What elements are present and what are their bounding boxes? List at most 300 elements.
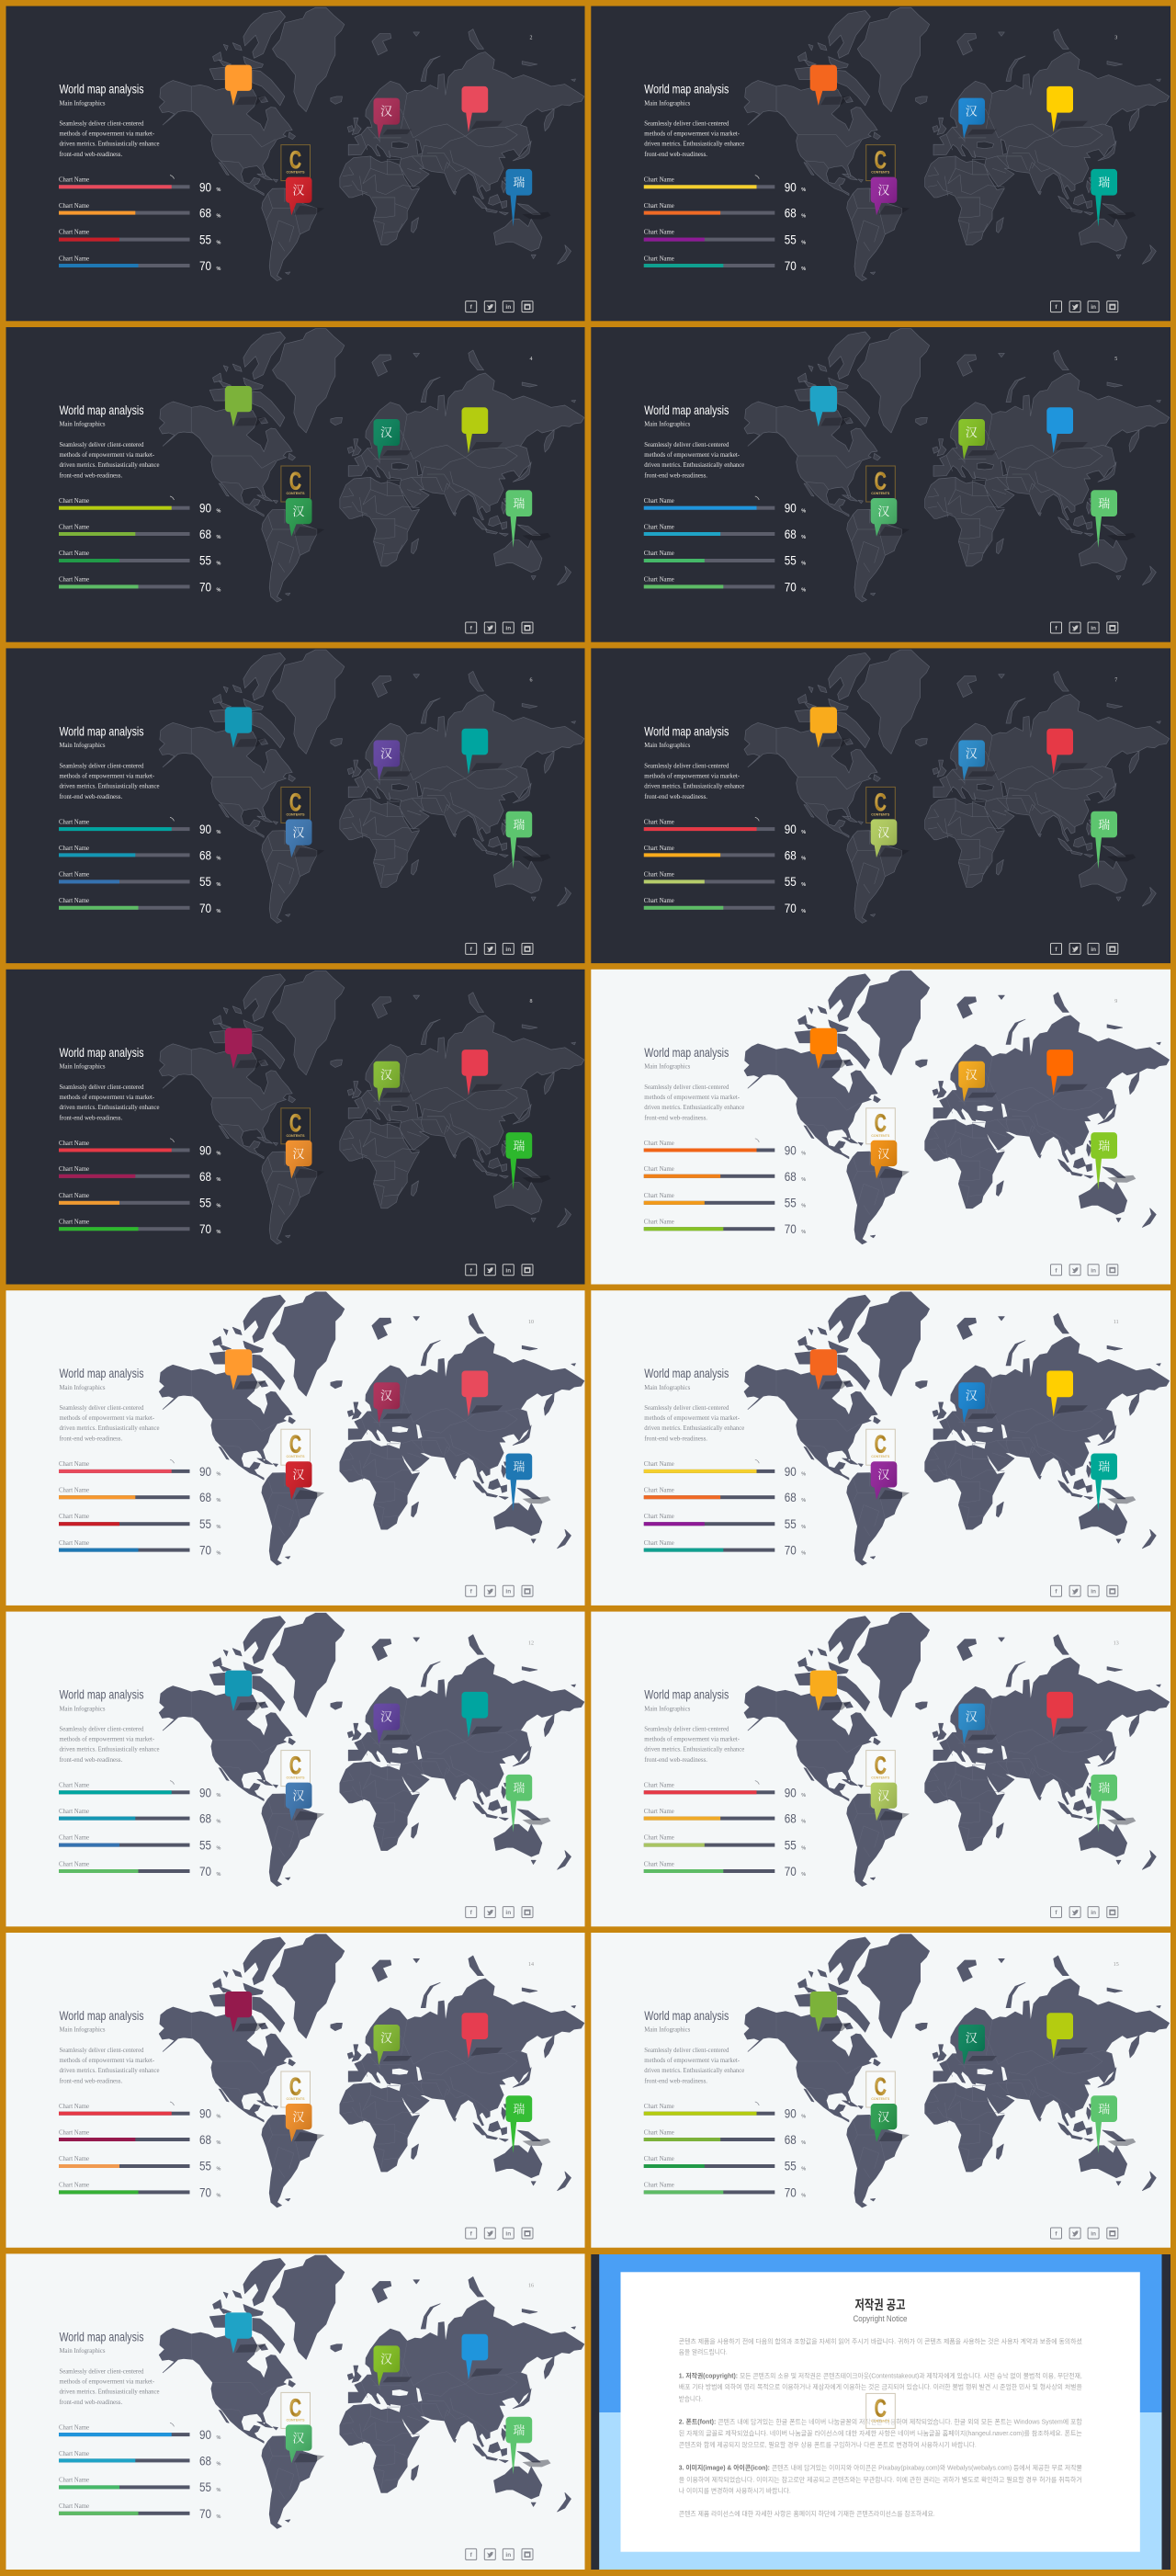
- panel: dark slide 4: [6, 327, 584, 642]
- bar row 70: [59, 255, 220, 273]
- description: driven metrics. Enthusiastically enhance: [59, 1424, 160, 1432]
- pin: South America: 汉: [877, 502, 889, 519]
- bar row 68: [644, 1808, 806, 1826]
- pin: North America: [225, 1028, 266, 1069]
- watermark badge: [281, 145, 311, 181]
- bar row 90: 90: [785, 501, 797, 516]
- bar row 70: Chart Name: [59, 1219, 89, 1226]
- description: front-end web-readiness.: [644, 2077, 707, 2084]
- bar row 68: 68: [199, 527, 211, 541]
- watermark badge: C: [875, 1109, 887, 1137]
- social icons: [1051, 1907, 1118, 1918]
- bar row 70: %: [217, 1230, 220, 1235]
- watermark badge: C: [289, 467, 301, 494]
- pin: South America: [286, 1140, 324, 1178]
- bar row 90: %: [217, 2114, 220, 2119]
- bar row 68: Chart Name: [59, 1487, 89, 1494]
- bar row 90: %: [801, 2114, 806, 2119]
- bar row 68: Chart Name: [59, 523, 89, 530]
- pin: Europe: [373, 1704, 412, 1744]
- bar row 68: 68: [199, 1811, 211, 1826]
- watermark badge: [281, 1429, 311, 1465]
- heading: World map analysis: [59, 2329, 143, 2343]
- watermark badge: CONTENTS: [871, 2418, 890, 2423]
- watermark badge: C: [875, 1431, 887, 1458]
- bar row 90: [59, 1140, 220, 1158]
- pin: South America: 汉: [292, 1787, 304, 1804]
- world map: [159, 2255, 584, 2528]
- pin: Europe: 汉: [380, 102, 392, 119]
- bar row 70: Chart Name: [644, 897, 674, 904]
- pin: South America: [871, 177, 910, 215]
- bar row 70: [59, 2502, 220, 2521]
- watermark badge: CONTENTS: [871, 491, 890, 495]
- heading: World map analysis: [644, 1687, 729, 1702]
- bar row 90: %: [217, 1793, 220, 1799]
- panel: light slide 11: [591, 1290, 1170, 1606]
- bar row 70: [59, 576, 220, 594]
- pin: Australasia: [505, 1132, 551, 1190]
- heading: World map analysis: [59, 1045, 143, 1060]
- description: front-end web-readiness.: [59, 2398, 122, 2406]
- bar row 68: %: [217, 2140, 220, 2146]
- watermark badge: CONTENTS: [871, 2096, 890, 2101]
- watermark badge: CONTENTS: [287, 491, 305, 495]
- pin: Australasia: 瑞: [1098, 2099, 1110, 2117]
- subheading: Main Infographics: [644, 2026, 690, 2034]
- description: Seamlessly deliver client-centered: [644, 1725, 729, 1733]
- bar row 90: 90: [785, 2106, 797, 2121]
- bar row 70: 70: [199, 1864, 211, 1878]
- heading: World map analysis: [59, 1687, 143, 1702]
- chart: bars with values: [644, 818, 806, 915]
- copyright body text: 받습니다.: [679, 2395, 703, 2403]
- chart: bars with values: [59, 176, 220, 273]
- bar row 90: %: [217, 509, 220, 515]
- description: driven metrics. Enthusiastically enhance: [644, 140, 745, 148]
- bar row 70: %: [217, 2514, 220, 2520]
- description: Seamlessly deliver client-centered: [644, 119, 729, 128]
- bar row 55: Chart Name: [644, 1834, 674, 1842]
- chart: bars with values: [644, 1782, 806, 1878]
- panel: light slide 14: [6, 1933, 584, 2248]
- bar row 55: 55: [199, 553, 211, 568]
- bar row 55: [59, 2476, 220, 2494]
- bar row 68: [59, 523, 220, 541]
- bar row 55: %: [801, 562, 806, 567]
- chart: bars with values: [59, 1782, 220, 1878]
- watermark badge: CONTENTS: [287, 811, 305, 816]
- world map: [744, 329, 1170, 602]
- pin: North America: [810, 1349, 851, 1390]
- bar row 90: 90: [199, 2427, 211, 2442]
- watermark badge: CONTENTS: [287, 170, 305, 175]
- watermark badge: [281, 1751, 311, 1787]
- panel: light slide 10: [6, 1290, 584, 1606]
- bar row 55: 55: [785, 553, 797, 568]
- social icons: [1051, 1265, 1118, 1276]
- pin: Europe: [958, 1704, 997, 1744]
- social icons: in: [505, 625, 511, 632]
- bar row 70: 70: [199, 901, 211, 915]
- bar row 55: 55: [199, 874, 211, 889]
- social icons: f: [1055, 947, 1057, 953]
- bar row 90: [59, 1782, 220, 1799]
- pin: Australasia: [1091, 1454, 1136, 1511]
- bar row 90: Chart Name: [59, 818, 89, 825]
- description: driven metrics. Enthusiastically enhance: [644, 1745, 745, 1753]
- description: Seamlessly deliver client-centered: [59, 1083, 144, 1091]
- panel: dark slide 8: [6, 970, 584, 1285]
- social icons: f: [470, 947, 473, 953]
- heading: World map analysis: [644, 1045, 729, 1060]
- world map: [159, 970, 584, 1244]
- heading: World map analysis: [644, 82, 729, 96]
- watermark badge: CONTENTS: [287, 2417, 305, 2422]
- bar row 55: [59, 1513, 220, 1531]
- subheading: Main Infographics: [644, 1062, 690, 1071]
- social icons: f: [1055, 625, 1057, 632]
- world map: [159, 1935, 584, 2207]
- pin: Russia: [461, 1050, 503, 1095]
- bar row 70: Chart Name: [644, 1219, 674, 1226]
- bar row 90: [644, 1460, 806, 1479]
- description: Seamlessly deliver client-centered: [59, 440, 144, 448]
- description: Seamlessly deliver client-centered: [644, 2046, 729, 2054]
- world map: [744, 1292, 1170, 1565]
- pin: Russia: [1046, 1692, 1088, 1738]
- pin: Europe: 汉: [380, 1386, 392, 1403]
- bar row 55: [644, 870, 806, 889]
- bar row 70: 70: [785, 1543, 797, 1558]
- page number: 10: [528, 1320, 534, 1325]
- pin: North America: [810, 1028, 851, 1069]
- pin: Europe: [958, 98, 997, 139]
- watermark badge: C: [875, 789, 887, 816]
- bar row 68: Chart Name: [644, 2128, 674, 2136]
- social icons: f: [470, 2231, 473, 2237]
- description: front-end web-readiness.: [644, 471, 707, 480]
- watermark badge: CONTENTS: [287, 1776, 305, 1780]
- panel: copyright notice: [591, 2254, 1170, 2570]
- bar row 55: 55: [199, 1837, 211, 1852]
- bar row 70: 70: [199, 1221, 211, 1236]
- bar row 70: 70: [785, 2184, 797, 2199]
- pin: Australasia: [505, 1454, 551, 1511]
- bar row 90: [59, 818, 220, 836]
- watermark badge: CONTENTS: [287, 1454, 305, 1458]
- bar row 90: Chart Name: [59, 176, 89, 184]
- copyright body text: 콘텐츠 제품 라이선스에 대한 자세한 사항은 홈페이지 하단에 기재한 콘텐츠라이선스를 참조하세요.: [679, 2510, 935, 2518]
- social icons: f: [1055, 1267, 1057, 1274]
- description: methods of empowerment via market-: [644, 771, 740, 779]
- watermark badge: CONTENTS: [287, 1133, 305, 1138]
- pin: South America: [286, 819, 324, 857]
- bar row 55: %: [801, 882, 806, 888]
- social icons: f: [1055, 2231, 1057, 2237]
- panel: light slide 13: [591, 1612, 1170, 1926]
- description: front-end web-readiness.: [59, 1113, 122, 1121]
- bar row 55: %: [217, 882, 220, 888]
- pin: Europe: 汉: [380, 2349, 392, 2366]
- heading: World map analysis: [644, 1366, 729, 1380]
- chart: bars with values: [59, 1140, 220, 1236]
- pin: South America: [871, 1140, 910, 1178]
- bar row 70: Chart Name: [59, 576, 89, 584]
- description: Seamlessly deliver client-centered: [59, 1403, 144, 1412]
- bar row 68: 68: [785, 527, 797, 541]
- pin: Australasia: 瑞: [513, 2421, 525, 2438]
- bar row 68: [644, 845, 806, 862]
- watermark badge: [866, 1429, 895, 1465]
- description: methods of empowerment via market-: [644, 1413, 740, 1422]
- bar row 90: Chart Name: [59, 497, 89, 505]
- page number: 7: [1114, 677, 1117, 683]
- heading: World map analysis: [59, 82, 143, 96]
- bar row 55: 55: [199, 2480, 211, 2494]
- bar row 68: %: [801, 214, 806, 220]
- bar row 90: 90: [199, 822, 211, 836]
- bar row 55: %: [801, 1525, 806, 1530]
- social icons: in: [1091, 304, 1096, 311]
- bar row 55: %: [801, 2167, 806, 2173]
- watermark badge: [281, 466, 311, 502]
- pin: North America: [810, 1671, 851, 1711]
- bar row 90: [59, 1460, 220, 1479]
- bar row 90: [59, 2423, 220, 2442]
- page number: 11: [1114, 1320, 1119, 1325]
- social icons: [466, 1907, 533, 1918]
- pin: Russia: [1046, 2013, 1088, 2059]
- bar row 70: [644, 576, 806, 594]
- description: methods of empowerment via market-: [59, 2056, 155, 2064]
- bar row 90: [644, 1140, 806, 1158]
- description: driven metrics. Enthusiastically enhance: [644, 460, 745, 469]
- pin: South America: 汉: [292, 823, 304, 840]
- pin: South America: 汉: [877, 181, 889, 199]
- description: methods of empowerment via market-: [644, 1093, 740, 1101]
- pin: Russia: [1046, 1050, 1088, 1095]
- description: front-end web-readiness.: [59, 2077, 122, 2084]
- world map: [744, 1935, 1170, 2207]
- bar row 68: [59, 202, 220, 221]
- social icons: f: [470, 304, 473, 311]
- bar row 90: Chart Name: [59, 1460, 89, 1468]
- bar row 90: 90: [199, 1785, 211, 1799]
- pin: Australasia: 瑞: [513, 1458, 525, 1475]
- bar row 55: 55: [199, 1516, 211, 1531]
- chart: bars with values: [644, 2103, 806, 2199]
- bar row 68: %: [801, 1177, 806, 1183]
- bar row 70: %: [801, 1551, 806, 1557]
- watermark badge: CONTENTS: [871, 1454, 890, 1458]
- bar row 70: [59, 1219, 220, 1236]
- watermark badge: C: [289, 2394, 301, 2422]
- bar row 68: %: [801, 856, 806, 861]
- bar row 90: %: [801, 187, 806, 193]
- pin: Europe: [373, 2025, 412, 2065]
- bar row 68: 68: [785, 847, 797, 862]
- bar row 90: 90: [199, 1143, 211, 1158]
- watermark badge: C: [875, 467, 887, 494]
- description: [59, 2046, 160, 2084]
- description: methods of empowerment via market-: [59, 450, 155, 459]
- watermark badge: [866, 1108, 895, 1144]
- description: [59, 2366, 160, 2406]
- social icons: in: [1091, 1267, 1096, 1274]
- bar row 90: 90: [785, 1785, 797, 1799]
- bar row 68: %: [217, 2461, 220, 2467]
- pin: South America: [871, 1461, 910, 1500]
- pin: Australasia: 瑞: [1098, 1136, 1110, 1153]
- bar row 90: [644, 818, 806, 836]
- description: methods of empowerment via market-: [644, 2056, 740, 2064]
- pin: Australasia: [1091, 1132, 1136, 1190]
- pin: South America: [871, 1783, 910, 1821]
- world map: [159, 7, 584, 281]
- social icons: f: [1055, 1910, 1057, 1916]
- bar row 68: %: [217, 1498, 220, 1504]
- bar row 70: 70: [199, 2506, 211, 2521]
- bar row 70: 70: [199, 579, 211, 594]
- pin: Russia: [461, 1692, 503, 1738]
- bar row 68: [644, 1165, 806, 1184]
- bar row 70: Chart Name: [644, 1860, 674, 1867]
- social icons: [466, 622, 533, 633]
- bar row 90: Chart Name: [644, 497, 674, 505]
- watermark badge: [866, 145, 895, 181]
- page number: 2: [529, 36, 533, 41]
- watermark badge: C: [289, 2072, 301, 2100]
- pin: North America: [225, 2312, 266, 2354]
- pin: Australasia: [505, 490, 551, 548]
- panel: dark slide 5: [591, 327, 1170, 642]
- bar row 68: 68: [199, 2453, 211, 2468]
- watermark badge: C: [875, 2394, 887, 2422]
- bar row 90: 90: [199, 501, 211, 516]
- pin: North America: [225, 1349, 266, 1390]
- bar row 90: Chart Name: [59, 1140, 89, 1147]
- pin: South America: [871, 2104, 910, 2142]
- pin: South America: 汉: [292, 1465, 304, 1482]
- pin: North America: [225, 707, 266, 748]
- pin: Australasia: [1091, 490, 1136, 548]
- bar row 68: 68: [785, 2132, 797, 2147]
- description: driven metrics. Enthusiastically enhance: [59, 1103, 160, 1111]
- watermark badge: C: [875, 1752, 887, 1779]
- social icons: [466, 2228, 533, 2239]
- bar row 90: Chart Name: [644, 818, 674, 825]
- pin: North America: [225, 1992, 266, 2032]
- chart: bars with values: [59, 2103, 220, 2199]
- bar row 68: %: [801, 535, 806, 540]
- bar row 68: Chart Name: [644, 202, 674, 210]
- bar row 70: %: [217, 1551, 220, 1557]
- bar row 70: %: [801, 587, 806, 593]
- pin: Europe: 汉: [966, 2028, 978, 2046]
- description: front-end web-readiness.: [644, 1435, 707, 1443]
- bar row 68: 68: [199, 1490, 211, 1504]
- heading: World map analysis: [59, 403, 143, 417]
- pin: North America: [225, 386, 266, 426]
- description: methods of empowerment via market-: [59, 1093, 155, 1101]
- watermark badge: [281, 1108, 311, 1144]
- copyright body text: 3. 이미지(image) & 아이콘(icon): 콘텐츠 내에 담겨있는 이미지와 아이콘은 Pixabay(pixabay.com)와 Webalys(webalys.com) 등에서 제공한 무료 저작물: [679, 2463, 1082, 2471]
- bar row 90: %: [217, 1151, 220, 1156]
- bar row 68: %: [801, 1498, 806, 1504]
- watermark badge: [866, 466, 895, 502]
- description: driven metrics. Enthusiastically enhance: [644, 1424, 745, 1432]
- world map: [159, 1292, 584, 1565]
- panel: light slide 9: [591, 970, 1170, 1285]
- pin: Europe: 汉: [380, 423, 392, 440]
- pin: Australasia: 瑞: [513, 815, 525, 833]
- bar row 90: 90: [785, 822, 797, 836]
- pin: Russia: [1046, 86, 1088, 132]
- bar row 55: Chart Name: [59, 2155, 89, 2162]
- pin: South America: [286, 2104, 324, 2142]
- bar row 70: 70: [785, 1221, 797, 1236]
- pin: Australasia: [505, 2417, 551, 2474]
- panel: light slide 12: [6, 1612, 584, 1926]
- bar row 90: %: [801, 1472, 806, 1478]
- copyright body text: 콘텐츠 제품을 사용하기 전에 다음의 합의과 조항값을 자세히 읽어 주시기 바랍니다. 귀하가 이 콘텐츠 제품을 사용하는 것은 사용자 계약과 보증에 동의하셨: [679, 2337, 1082, 2345]
- chart: bars with values: [644, 1460, 806, 1558]
- copyright title: 저작권 공고: [854, 2298, 906, 2312]
- social icons: [1051, 2228, 1118, 2239]
- watermark badge: C: [289, 1752, 301, 1779]
- pin: North America: [810, 386, 851, 426]
- pin: South America: 汉: [877, 1144, 889, 1162]
- pin: North America: [810, 1992, 851, 2032]
- bar row 90: 90: [785, 1143, 797, 1158]
- social icons: in: [505, 2552, 511, 2559]
- bar row 55: [59, 229, 220, 246]
- subheading: Main Infographics: [644, 741, 690, 749]
- bar row 70: %: [217, 587, 220, 593]
- bar row 55: Chart Name: [59, 550, 89, 557]
- pin: South America: [286, 498, 324, 537]
- copyright body text: 나 이미지를 변경하여 사용하시기 바랍니다.: [679, 2487, 791, 2495]
- bar row 68: 68: [199, 847, 211, 862]
- bar row 70: Chart Name: [59, 897, 89, 904]
- pin: Europe: [373, 1061, 412, 1102]
- social icons: in: [1091, 2231, 1096, 2237]
- description: driven metrics. Enthusiastically enhance: [59, 1745, 160, 1753]
- bar row 90: %: [217, 187, 220, 193]
- description: [644, 440, 745, 480]
- social icons: [466, 2548, 533, 2559]
- pin: South America: 汉: [877, 1465, 889, 1482]
- bar row 68: 68: [785, 1169, 797, 1184]
- bar row 70: 70: [785, 579, 797, 594]
- description: driven metrics. Enthusiastically enhance: [644, 781, 745, 789]
- pin: Russia: [461, 2013, 503, 2059]
- bar row 55: 55: [785, 1196, 797, 1210]
- pin: Europe: [958, 2025, 997, 2065]
- social icons: [1051, 943, 1118, 954]
- watermark badge: C: [289, 1431, 301, 1458]
- heading: World map analysis: [644, 403, 729, 417]
- pin: Australasia: [1091, 2095, 1136, 2153]
- description: driven metrics. Enthusiastically enhance: [59, 140, 160, 148]
- pin: Australasia: 瑞: [1098, 494, 1110, 511]
- pin: Europe: 汉: [966, 423, 978, 440]
- pin: Australasia: 瑞: [513, 1136, 525, 1153]
- pin: Russia: [461, 407, 503, 453]
- bar row 70: 70: [199, 258, 211, 273]
- description: Seamlessly deliver client-centered: [59, 1725, 144, 1733]
